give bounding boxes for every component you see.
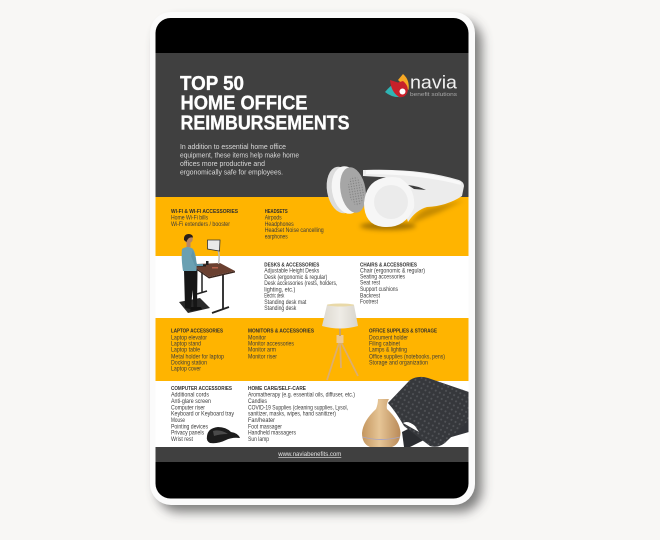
- section: office supplies and storage: [369, 329, 445, 366]
- floor lamp image: [322, 304, 358, 380]
- section: computer accessories: Wrist rest: [171, 436, 193, 443]
- website footer link: www.naviabenefits.com: [277, 451, 341, 458]
- section: laptop accessories: Metal holder for laptop: [171, 353, 224, 360]
- section: monitors and accessories: Monitor arm: [248, 347, 276, 354]
- section: home care and self-care: Foot massager: [248, 423, 282, 430]
- section: computer accessories: Computer riser: [171, 404, 205, 411]
- section: laptop accessories: Laptop stand: [171, 341, 201, 348]
- section: chairs and accessories: Footrest: [360, 299, 378, 306]
- title: TOP 50: [180, 73, 244, 95]
- section: laptop accessories: Laptop table: [171, 347, 200, 354]
- section: chairs and accessories: [360, 262, 425, 306]
- section: monitors and accessories: Monitor accessories: [248, 341, 294, 348]
- section: office supplies and storage: Lamps & lighting: [369, 347, 407, 354]
- section: headsets: HEADSETS: [265, 209, 288, 215]
- ergonomic mouse image: [207, 427, 240, 443]
- section: computer accessories: COMPUTER ACCESSORIES: [171, 386, 232, 392]
- section: home care and self-care: Candles: [248, 398, 267, 405]
- section: home care and self-care: Aromatherapy (e.g. essential oils, diffuser, etc.): [248, 392, 355, 399]
- section: home care and self-care: Sun lamp: [248, 436, 269, 443]
- intro text: equipment, these items help make home: [180, 152, 299, 160]
- navia logo: navia: [410, 72, 458, 92]
- section: wi-fi accessories: Wi-Fi extenders / booster: [171, 221, 230, 228]
- section: computer accessories: [171, 386, 235, 443]
- section: office supplies and storage: Storage and organization: [369, 359, 428, 366]
- section: headsets: Headphones: [265, 221, 294, 228]
- section: wi-fi accessories: WI-FI & WI-FI ACCESSORIES: [171, 209, 238, 215]
- navia logo: [385, 74, 457, 98]
- section: monitors and accessories: Monitor riser: [248, 353, 277, 360]
- section: laptop accessories: Laptop elevator: [171, 334, 207, 341]
- section: chairs and accessories: Backrest: [360, 292, 380, 299]
- section: home care and self-care: Handheld massagers: [248, 430, 296, 437]
- section: chairs and accessories: Chair (ergonomic & regular): [360, 267, 425, 274]
- section: laptop accessories: LAPTOP ACCESSORIES: [171, 329, 223, 335]
- section: monitors and accessories: Monitor: [248, 334, 266, 341]
- section: desks and accessories: Standing desk: [264, 305, 297, 312]
- section: home care and self-care: sanitizer, masks, wipes, hand sanitizer): [248, 411, 336, 418]
- section: laptop accessories: [171, 329, 224, 373]
- section: headsets: [265, 209, 324, 240]
- section: laptop accessories: Docking station: [171, 359, 207, 366]
- section: home care and self-care: [248, 386, 355, 443]
- section: computer accessories: Anti-glare screen: [171, 398, 211, 405]
- section: wi-fi accessories: [171, 209, 238, 226]
- section: office supplies and storage: OFFICE SUPPLIES & STORAGE: [369, 329, 437, 335]
- tablet screen: [156, 18, 469, 499]
- title: HOME OFFICE: [180, 92, 308, 114]
- section: headsets: Airpods: [265, 215, 282, 222]
- title: REIMBURSEMENTS: [180, 112, 350, 134]
- section: desks and accessories: lighting, etc.): [264, 287, 295, 294]
- section: office supplies and storage: Document holder: [369, 334, 408, 341]
- section: desks and accessories: Standing desk mat: [264, 299, 307, 306]
- tablet frame: [150, 12, 475, 505]
- section: chairs and accessories: CHAIRS & ACCESSORIES: [360, 262, 417, 268]
- section: wi-fi accessories: Home Wi-Fi bills: [171, 215, 208, 222]
- section: computer accessories: Pointing devices: [171, 423, 208, 430]
- section: desks and accessories: DESKS & ACCESSORIES: [264, 262, 320, 268]
- section: computer accessories: Mouse: [171, 417, 185, 424]
- footrest image: [388, 377, 469, 447]
- section: home care and self-care: Fan/heater: [248, 417, 275, 424]
- section: chairs and accessories: Support cushions: [360, 286, 398, 293]
- intro text: offices more productive and: [180, 161, 265, 168]
- aroma diffuser image: [362, 399, 400, 447]
- section: desks and accessories: Desk (ergonomic & regular): [264, 274, 327, 281]
- section: home care and self-care: COVID-19 Supplies (cleaning supplies, Lysol,: [248, 404, 348, 411]
- headphones image: [323, 164, 464, 230]
- section: computer accessories: Privacy panels: [171, 430, 204, 437]
- section: monitors and accessories: [248, 329, 314, 360]
- section: computer accessories: Keyboard or Keyboard tray: [171, 411, 235, 418]
- intro text: In addition to essential home office: [180, 144, 286, 151]
- section: office supplies and storage: Filing cabinet: [369, 341, 400, 348]
- section: desks and accessories: Electric desk: [264, 293, 285, 300]
- section: desks and accessories: [264, 262, 338, 312]
- section: home care and self-care: HOME CARE/SELF-CARE: [248, 386, 306, 392]
- title: [180, 76, 349, 130]
- section: headsets: Headset Noise cancelling: [265, 227, 324, 234]
- section: office supplies and storage: Office supplies (notebooks, pens): [369, 353, 445, 360]
- standing desk with man image: [179, 234, 235, 313]
- intro text: [180, 144, 299, 176]
- section: monitors and accessories: MONITORS & ACCESSORIES: [248, 329, 314, 335]
- section: desks and accessories: Desk accessories (rests, holders,: [264, 280, 338, 287]
- section: computer accessories: Additional cords: [171, 392, 209, 399]
- section: headsets: earphones: [265, 234, 288, 240]
- section: desks and accessories: Adjustable Height Desks: [264, 268, 319, 275]
- intro text: ergonomically safe for employees.: [180, 170, 283, 176]
- section: chairs and accessories: Seating accessories: [360, 273, 405, 280]
- navia logo: benefit solutions: [410, 92, 458, 98]
- section: chairs and accessories: Seat rest: [360, 280, 380, 287]
- tablet drop shadow: [157, 20, 482, 512]
- section: laptop accessories: Laptop cover: [171, 366, 201, 373]
